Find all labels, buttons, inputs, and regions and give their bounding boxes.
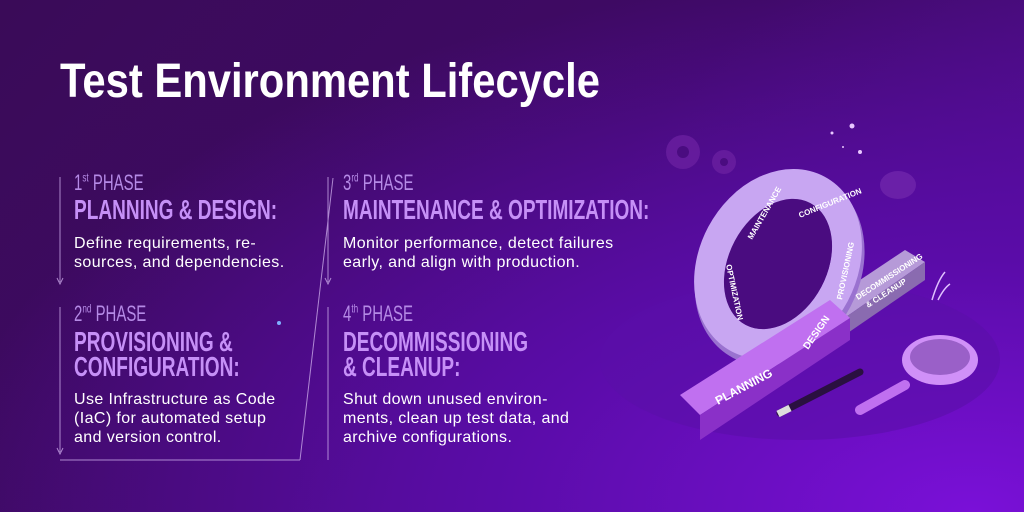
phase 1 <box>74 170 285 271</box>
sparkle <box>932 272 950 300</box>
phase 4 heading <box>343 326 528 382</box>
phase 2 heading: PROVISIONING & <box>74 326 233 357</box>
phase 2 heading <box>74 326 240 382</box>
ring labels <box>724 185 924 321</box>
ring labels: CONFIGURATION <box>797 186 863 220</box>
phase 4 label: 4th PHASE <box>343 301 413 326</box>
phase 2 text: and version control. <box>74 429 222 446</box>
pen <box>780 372 860 413</box>
ring labels: OPTIMIZATION <box>724 264 745 321</box>
phase 2 label: 2nd PHASE <box>74 301 146 326</box>
phase 4 text: ments, clean up test data, and <box>343 410 569 427</box>
phase 2 text: (IaC) for automated setup <box>74 410 266 427</box>
phase 4 text: archive configurations. <box>343 429 512 446</box>
phase 1 text: sources, and dependencies. <box>74 254 285 271</box>
phase 3 heading: MAINTENANCE & OPTIMIZATION: <box>343 194 649 225</box>
magnifier <box>860 385 905 410</box>
phase 4 text <box>343 391 569 446</box>
illustration: lifecycle ring: PLANNING <box>713 366 775 408</box>
phase 1 text <box>74 235 285 271</box>
phase 1 heading: PLANNING & DESIGN: <box>74 194 277 225</box>
phase 2 text: Use Infrastructure as Code <box>74 391 276 408</box>
title: Test Environment Lifecycle <box>60 55 600 108</box>
ring labels: & CLEANUP <box>864 276 909 310</box>
gears <box>666 135 736 174</box>
ring labels: PROVISIONING <box>835 241 856 300</box>
phase 1 text: Define requirements, re- <box>74 235 256 252</box>
phase 3 text: Monitor performance, detect failures <box>343 235 614 252</box>
phase 4 heading: & CLEANUP: <box>343 351 460 382</box>
phase 4 text: Shut down unused environ- <box>343 391 548 408</box>
phase 2 text <box>74 391 276 446</box>
ring <box>680 160 877 374</box>
phase 2 heading: CONFIGURATION: <box>74 351 240 382</box>
beam front (planning/design) <box>680 300 850 415</box>
phase 3 label: 3rd PHASE <box>343 170 413 195</box>
ring labels: DECOMMISSIONING <box>854 252 924 302</box>
phase 2 <box>74 301 276 446</box>
phase 4 <box>343 301 569 446</box>
cloud <box>880 171 916 199</box>
beam back (decommissioning) <box>800 250 925 335</box>
phase 4 heading: DECOMMISSIONING <box>343 326 528 357</box>
stars <box>830 124 862 154</box>
ring labels: MAINTENANCE <box>746 185 784 241</box>
phase 3 text: early, and align with production. <box>343 254 580 271</box>
phase 1 label: 1st PHASE <box>74 170 144 195</box>
illustration: lifecycle ring: DESIGN <box>801 314 832 352</box>
phase 3 text <box>343 235 614 271</box>
illustration: lifecycle ring <box>666 124 1000 440</box>
phase 3 <box>343 170 649 271</box>
platform ellipse <box>600 280 1000 440</box>
